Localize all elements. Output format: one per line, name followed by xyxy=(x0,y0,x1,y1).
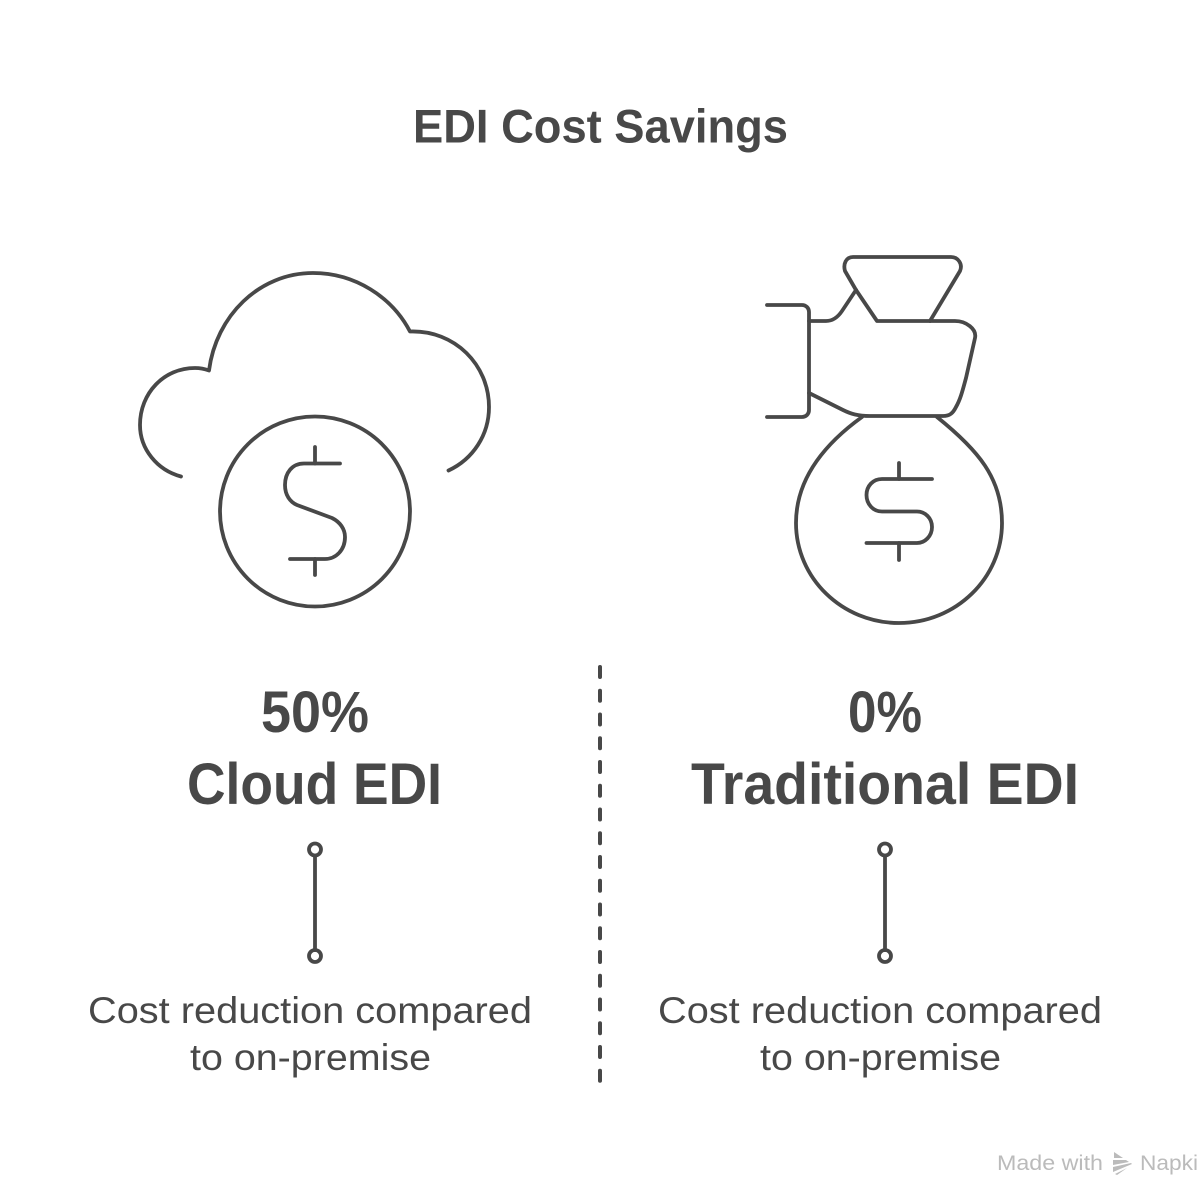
stat: 50%: 50% xyxy=(261,680,369,745)
description: to on-premise xyxy=(760,1037,1001,1078)
description xyxy=(88,990,532,1078)
stat: 0%: 0% xyxy=(848,680,922,745)
description: to on-premise xyxy=(190,1037,431,1078)
description xyxy=(658,990,1102,1078)
panel: traditional EDI xyxy=(658,680,1102,1078)
connector xyxy=(309,844,321,962)
icon: Napki logo xyxy=(1113,1152,1132,1175)
watermark: Napki xyxy=(1140,1152,1198,1175)
icon: cloud with dollar coin xyxy=(140,273,489,606)
heading: traditional EDI: Traditional EDI xyxy=(691,752,1079,817)
heading: cloud EDI: Cloud EDI xyxy=(187,752,442,817)
icon: hand holding money bag xyxy=(767,257,1002,623)
description: Cost reduction compared xyxy=(88,990,532,1031)
title: EDI Cost Savings xyxy=(413,100,788,152)
description: Cost reduction compared xyxy=(658,990,1102,1031)
divider xyxy=(598,667,602,1083)
panel: cloud EDI xyxy=(88,680,532,1078)
watermark: Made with xyxy=(997,1152,1103,1175)
watermark xyxy=(997,1152,1198,1175)
connector xyxy=(879,844,891,962)
